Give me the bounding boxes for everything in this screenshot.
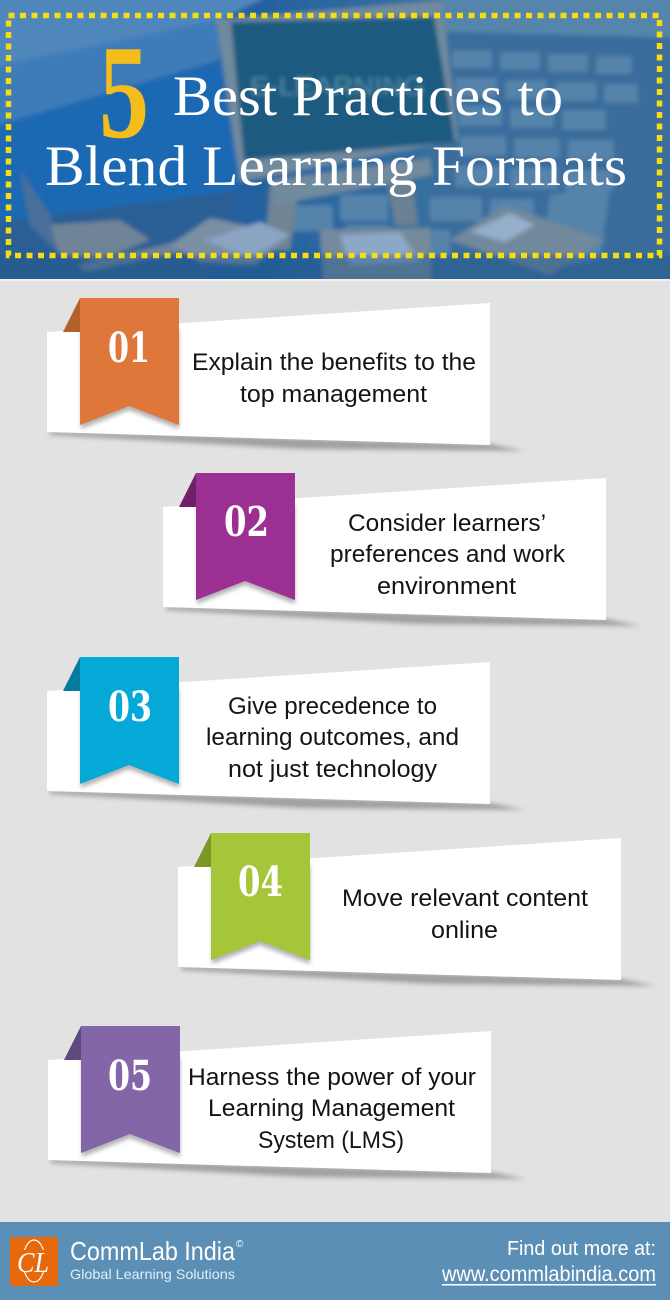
dotted yellow frame (8, 16, 660, 256)
ribbon (196, 473, 295, 600)
text: step 01: top management (240, 381, 427, 408)
ribbon fold (64, 1026, 81, 1060)
text: step 01 (192, 349, 476, 408)
header bottom edge (0, 279, 670, 281)
text: step 05: Learning Management (208, 1095, 455, 1122)
text: step 04 (342, 885, 588, 944)
ribbon fold (179, 473, 196, 507)
title line 2: Blend Learning Formats (45, 135, 627, 198)
panel: step 01 (47, 298, 525, 451)
ribbon (81, 1026, 180, 1153)
ribbon (80, 298, 179, 425)
copyright mark: © (236, 1239, 244, 1250)
white card (163, 478, 606, 620)
text: step 03: not just technology (228, 756, 437, 783)
title (46, 49, 625, 197)
card shadow (50, 790, 525, 810)
text: step 05: System (LMS) (258, 1127, 404, 1154)
text: step 03: learning outcomes, and (206, 724, 459, 751)
ribbon fold (63, 657, 80, 691)
find out more: Find out more at: (507, 1238, 656, 1260)
panel: step 05 (48, 1026, 526, 1179)
footer bar (0, 1222, 670, 1300)
white card (47, 662, 490, 804)
card shadow (51, 1159, 526, 1179)
ribbon fold (194, 833, 211, 867)
number 05: 05 (108, 1052, 152, 1100)
card shadow (166, 606, 641, 626)
brand tagline: Global Learning Solutions (70, 1266, 235, 1282)
number 02: 02 (224, 498, 269, 546)
ribbon fold (63, 298, 80, 332)
number 01: 01 (108, 324, 150, 372)
header banner (0, 0, 670, 300)
brand name: CommLab India (70, 1236, 235, 1266)
ribbon shadow (212, 865, 310, 964)
white card (178, 838, 621, 980)
number 04: 04 (238, 858, 283, 906)
website link: www.commlabindia.com (441, 1263, 656, 1286)
white card (47, 303, 490, 445)
text: step 02: Consider learners’ (348, 510, 546, 537)
number 03: 03 (108, 683, 152, 731)
header photo: classroom on keyboard: E-LEARNING (250, 71, 425, 101)
text: step 02 (330, 510, 566, 600)
text: step 04: online (431, 917, 498, 944)
text: step 04: Move relevant content (342, 885, 588, 912)
ribbon shadow (81, 330, 179, 429)
large numeral 5: 5 (99, 18, 149, 166)
panel: step 02 (163, 473, 641, 626)
card shadow (181, 966, 656, 986)
white card (48, 1031, 491, 1173)
ribbon (211, 833, 310, 960)
text: step 05: Harness the power of your (188, 1064, 476, 1091)
header photo: classroom on keyboard (0, 0, 670, 300)
card shadow (50, 431, 525, 451)
text: step 05 (188, 1064, 476, 1154)
ribbon shadow (197, 505, 295, 604)
footer (0, 1222, 670, 1300)
text: step 02: environment (377, 573, 516, 600)
panel: step 04 (178, 833, 656, 986)
text: step 03 (206, 693, 459, 783)
desks and chairs (78, 240, 190, 272)
ribbon (80, 657, 179, 784)
logo: CommLab India mark: CL (17, 1247, 49, 1279)
blackboard easel (216, 0, 458, 182)
text: step 02: preferences and work (330, 541, 566, 568)
ribbon shadow (82, 1058, 180, 1157)
title line 1: Best Practices to (173, 65, 563, 128)
text: step 01: Explain the benefits to the (192, 349, 476, 376)
text: step 03: Give precedence to (228, 693, 437, 720)
ribbon shadow (81, 689, 179, 788)
panel: step 03 (47, 657, 525, 810)
logo: CommLab India mark (10, 1237, 58, 1286)
